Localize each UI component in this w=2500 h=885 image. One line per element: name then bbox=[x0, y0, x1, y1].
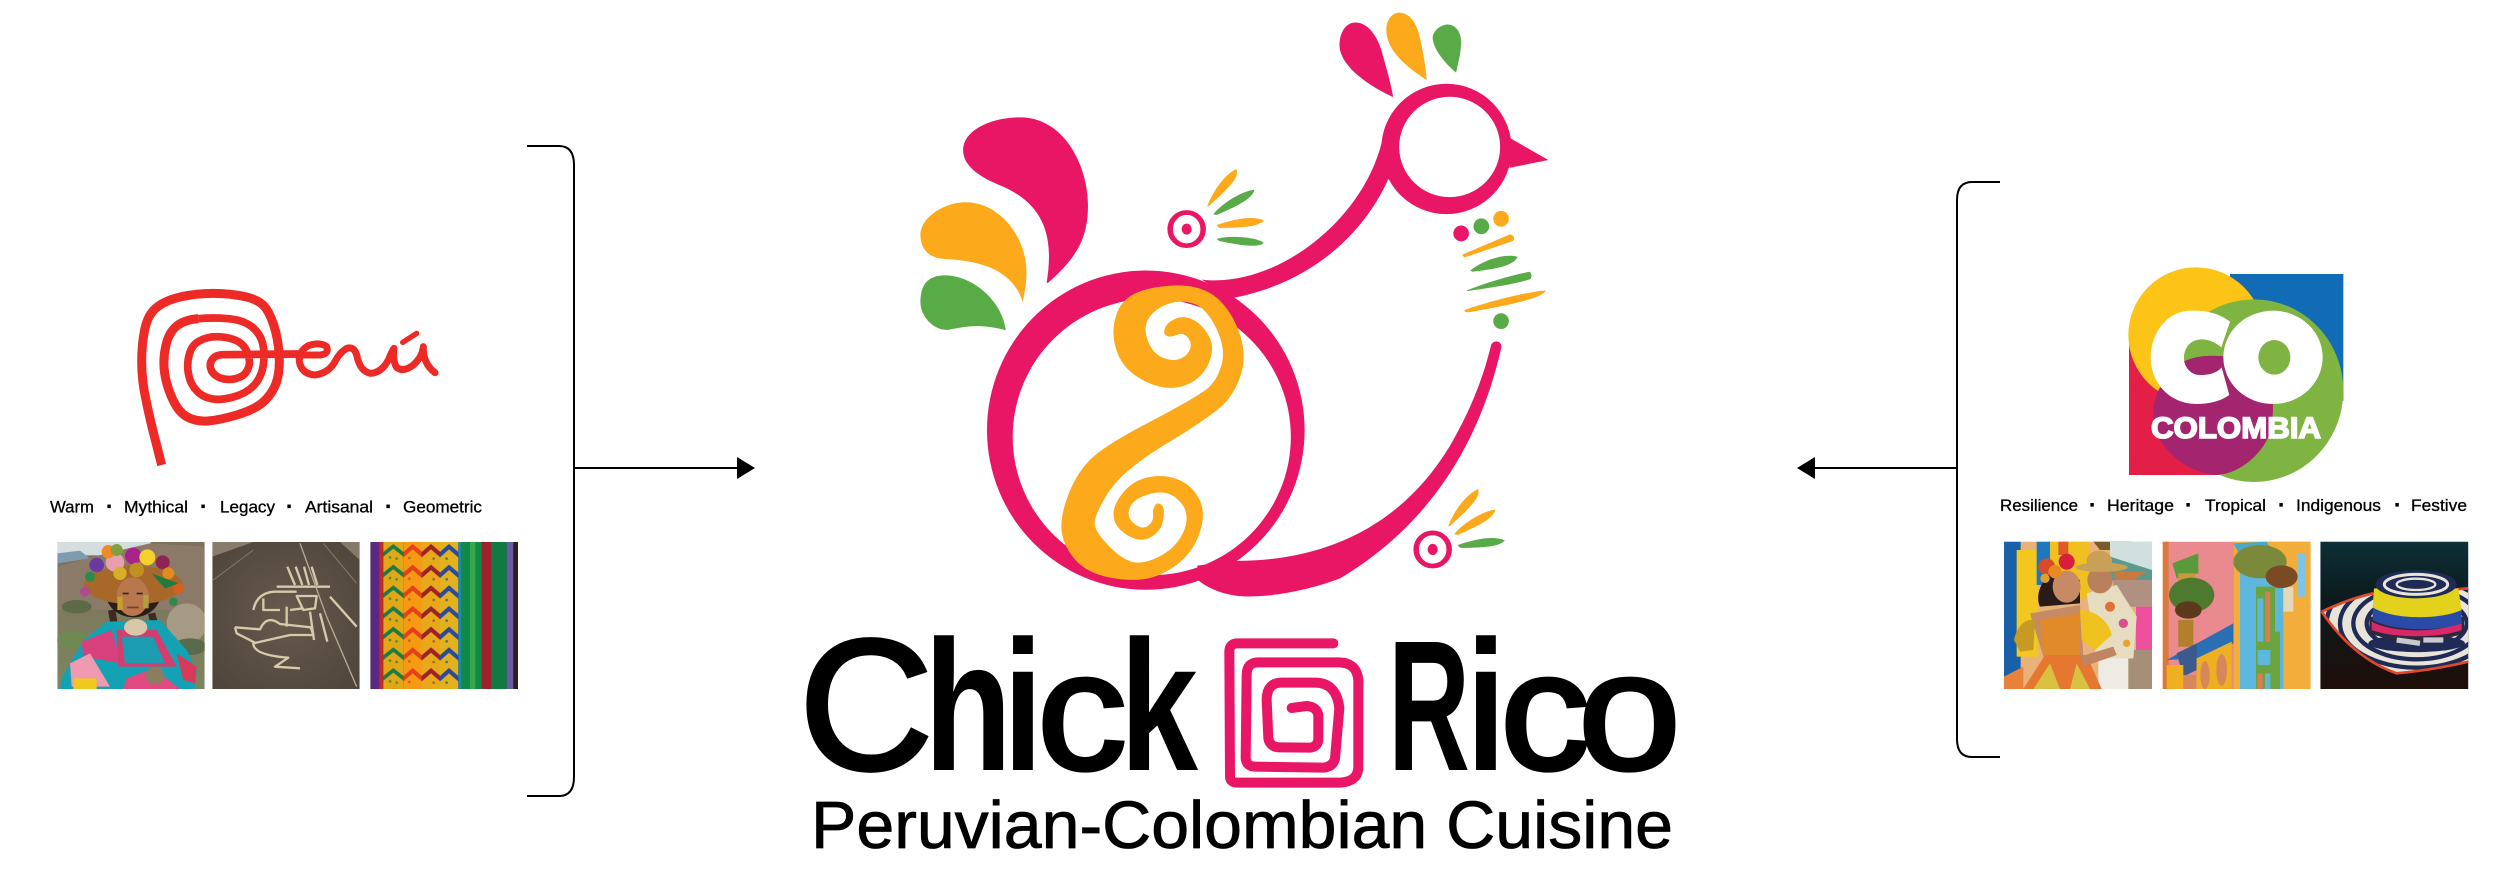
photo: Nazca geoglyph on rock bbox=[212, 542, 360, 689]
Colombia keywords: · bbox=[2089, 492, 2096, 518]
arrow: Peru to Chick Rico bbox=[574, 457, 755, 479]
rooster beak bbox=[1509, 138, 1548, 168]
wordmark: Chick: k bbox=[1120, 603, 1198, 810]
wordmark: Rico: R bbox=[1388, 603, 1470, 810]
Peru keywords: Warm bbox=[50, 498, 94, 516]
bracket: Peru bbox=[527, 146, 574, 796]
wordmark: Chick: i bbox=[1003, 603, 1043, 810]
Colombia keywords: · bbox=[2394, 492, 2401, 518]
motif: chest dots and dashes bbox=[1453, 211, 1546, 329]
tagline: Peruvian-Colombian Cuisine bbox=[811, 788, 1673, 863]
photo: Colombian couple in festive dress bbox=[2004, 542, 2152, 689]
Peru keywords: · bbox=[106, 494, 113, 519]
icon: rooster bbox=[920, 13, 1548, 596]
Peru keywords bbox=[50, 494, 482, 519]
Colombia keywords: Tropical bbox=[2205, 496, 2266, 515]
Colombia keywords bbox=[2000, 492, 2467, 518]
Colombia logo bbox=[2128, 267, 2343, 482]
motif: lower target with dashes bbox=[1416, 489, 1505, 566]
wordmark: Rico: o bbox=[1578, 617, 1681, 805]
rooster sweeping tail curve bbox=[1197, 341, 1502, 596]
wordmark: Chick: c bbox=[1037, 617, 1127, 805]
rooster crest bbox=[1340, 13, 1461, 97]
Peru keywords: · bbox=[385, 494, 392, 519]
orange spiral bbox=[1061, 285, 1244, 580]
motif: upper target with dashes bbox=[1170, 169, 1264, 246]
photos: Peru bbox=[57, 542, 518, 689]
wordmark: Rico: c bbox=[1500, 617, 1590, 805]
Peru keywords: Legacy bbox=[220, 498, 275, 516]
rooster head bbox=[1381, 84, 1512, 214]
Colombia keywords: Resilience bbox=[2000, 496, 2078, 515]
Colombia keywords: Heritage bbox=[2107, 496, 2174, 515]
photo: colourful colonial facade bbox=[2163, 542, 2311, 689]
Colombia keywords: · bbox=[2278, 492, 2285, 518]
Colombia keywords: · bbox=[2185, 492, 2192, 518]
wordmark: Chick: C bbox=[799, 602, 933, 809]
arrow: Colombia to Chick Rico bbox=[1797, 457, 1957, 479]
Peru keywords: Mythical bbox=[124, 498, 188, 516]
panel: Chick Rico logo bbox=[799, 13, 1681, 863]
wordmark: Chick bbox=[799, 602, 1198, 810]
Peru keywords: Artisanal bbox=[305, 498, 373, 516]
photo: Peruvian woman in traditional dress bbox=[57, 542, 207, 689]
photo: sombrero vueltiao bbox=[2320, 542, 2468, 689]
panel: Peru bbox=[50, 146, 755, 796]
photos: Colombia bbox=[2004, 542, 2500, 689]
Colombia logo: COLOMBIA bbox=[2151, 412, 2321, 445]
wordmark: Chick: h bbox=[924, 603, 1012, 810]
icon: square spiral bbox=[1229, 643, 1358, 783]
Peru keywords: · bbox=[200, 494, 207, 519]
Peru keywords: · bbox=[286, 494, 293, 519]
bracket: Colombia bbox=[1957, 182, 2000, 757]
panel: Colombia bbox=[1797, 182, 2500, 757]
Colombia keywords: Festive bbox=[2411, 496, 2467, 515]
Peru keywords: Geometric bbox=[403, 498, 482, 516]
Colombia keywords: Indigenous bbox=[2296, 496, 2381, 515]
rooster body ring bbox=[987, 271, 1305, 590]
wordmark: Rico bbox=[1388, 603, 1681, 810]
rooster tail feathers bbox=[920, 117, 1088, 330]
photo: Andean woven textile bbox=[370, 542, 518, 689]
wordmark: Rico: i bbox=[1466, 603, 1506, 810]
rooster neck bbox=[1202, 142, 1389, 298]
Peru logo bbox=[142, 293, 435, 465]
